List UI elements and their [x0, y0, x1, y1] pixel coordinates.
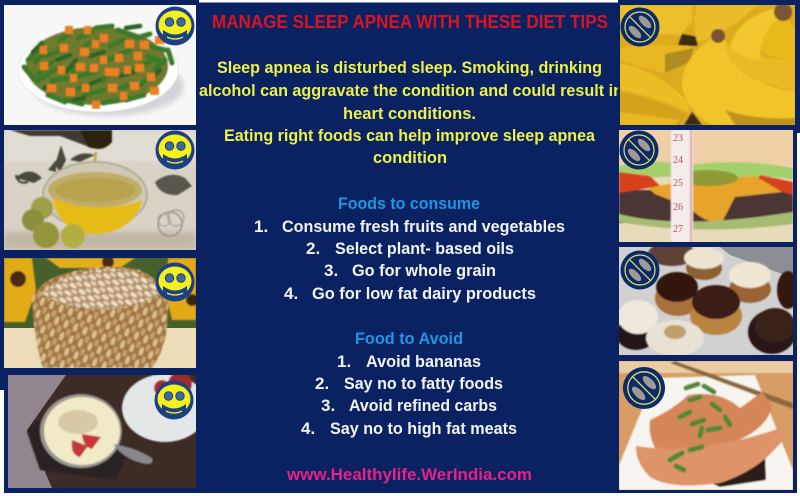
intro text: alcohol can aggravate the condition and could result in	[199, 81, 623, 100]
list: food to avoid: Say no to high fat meats	[330, 419, 517, 438]
photo panel: burger with tape measure: 25	[673, 178, 683, 189]
icon: avoid sign on burger	[620, 130, 658, 170]
photo panel: burger with tape measure: 24	[673, 155, 683, 166]
photo panel: burger with tape measure: 26	[673, 202, 683, 213]
list: food to avoid: Avoid bananas	[366, 352, 481, 371]
intro text: condition	[373, 148, 447, 167]
list: foods to consume: Consume fresh fruits and vegetables	[282, 217, 565, 236]
photo panel: burger with tape measure	[619, 130, 793, 242]
list: food to avoid: 4.	[301, 419, 315, 438]
icon: avoid sign on cupcakes	[620, 250, 660, 290]
icon: smiley on yogurt	[154, 380, 194, 420]
photo panel: olive oil	[4, 130, 196, 250]
list: foods to consume: Go for whole grain	[352, 261, 496, 280]
list: food to avoid: Avoid refined carbs	[349, 396, 497, 415]
icon: smiley on bread	[156, 262, 194, 302]
photo panel: mixed vegetables	[4, 5, 196, 125]
heading: foods to consume: Foods to consume	[338, 194, 480, 213]
icon: avoid sign on salmon	[623, 367, 665, 409]
list: food to avoid: 2.	[315, 374, 329, 393]
list: foods to consume: Select plant- based oils	[335, 239, 514, 258]
list: food to avoid: Say no to fatty foods	[344, 374, 503, 393]
list: foods to consume	[254, 217, 565, 303]
list: foods to consume: 1.	[254, 217, 268, 236]
list: foods to consume: Go for low fat dairy products	[312, 284, 536, 303]
intro text: heart conditions.	[343, 104, 476, 123]
photo panel: cupcakes	[616, 242, 799, 356]
photo panel: burger with tape measure: 27	[673, 224, 683, 235]
icon: avoid sign on bananas	[620, 8, 660, 46]
photo panel: burger with tape measure: 23	[673, 133, 683, 144]
intro text: Eating right foods can help improve sleep apnea	[224, 126, 596, 145]
intro text: Sleep apnea is disturbed sleep. Smoking, drinking	[217, 58, 602, 77]
list: food to avoid: 1.	[337, 352, 351, 371]
website url: www.Healthylife.WerIndia.com	[286, 465, 532, 484]
list: foods to consume: 2.	[306, 239, 320, 258]
icon: smiley on oil	[156, 130, 194, 170]
list: food to avoid: 3.	[321, 396, 335, 415]
photo panel: salmon with green onion	[619, 361, 793, 490]
list: food to avoid	[301, 352, 517, 438]
heading: food to avoid: Food to Avoid	[355, 329, 463, 348]
list: foods to consume: 4.	[284, 284, 298, 303]
icon: smiley on vegetables	[156, 6, 194, 46]
photo panel: yogurt bowl	[8, 372, 208, 488]
photo panel: bananas	[620, 3, 795, 125]
list: foods to consume: 3.	[324, 261, 338, 280]
intro text	[199, 58, 623, 167]
title: MANAGE SLEEP APNEA WITH THESE DIET TIPS	[212, 12, 608, 32]
photo panel: whole grain bread	[4, 256, 198, 368]
